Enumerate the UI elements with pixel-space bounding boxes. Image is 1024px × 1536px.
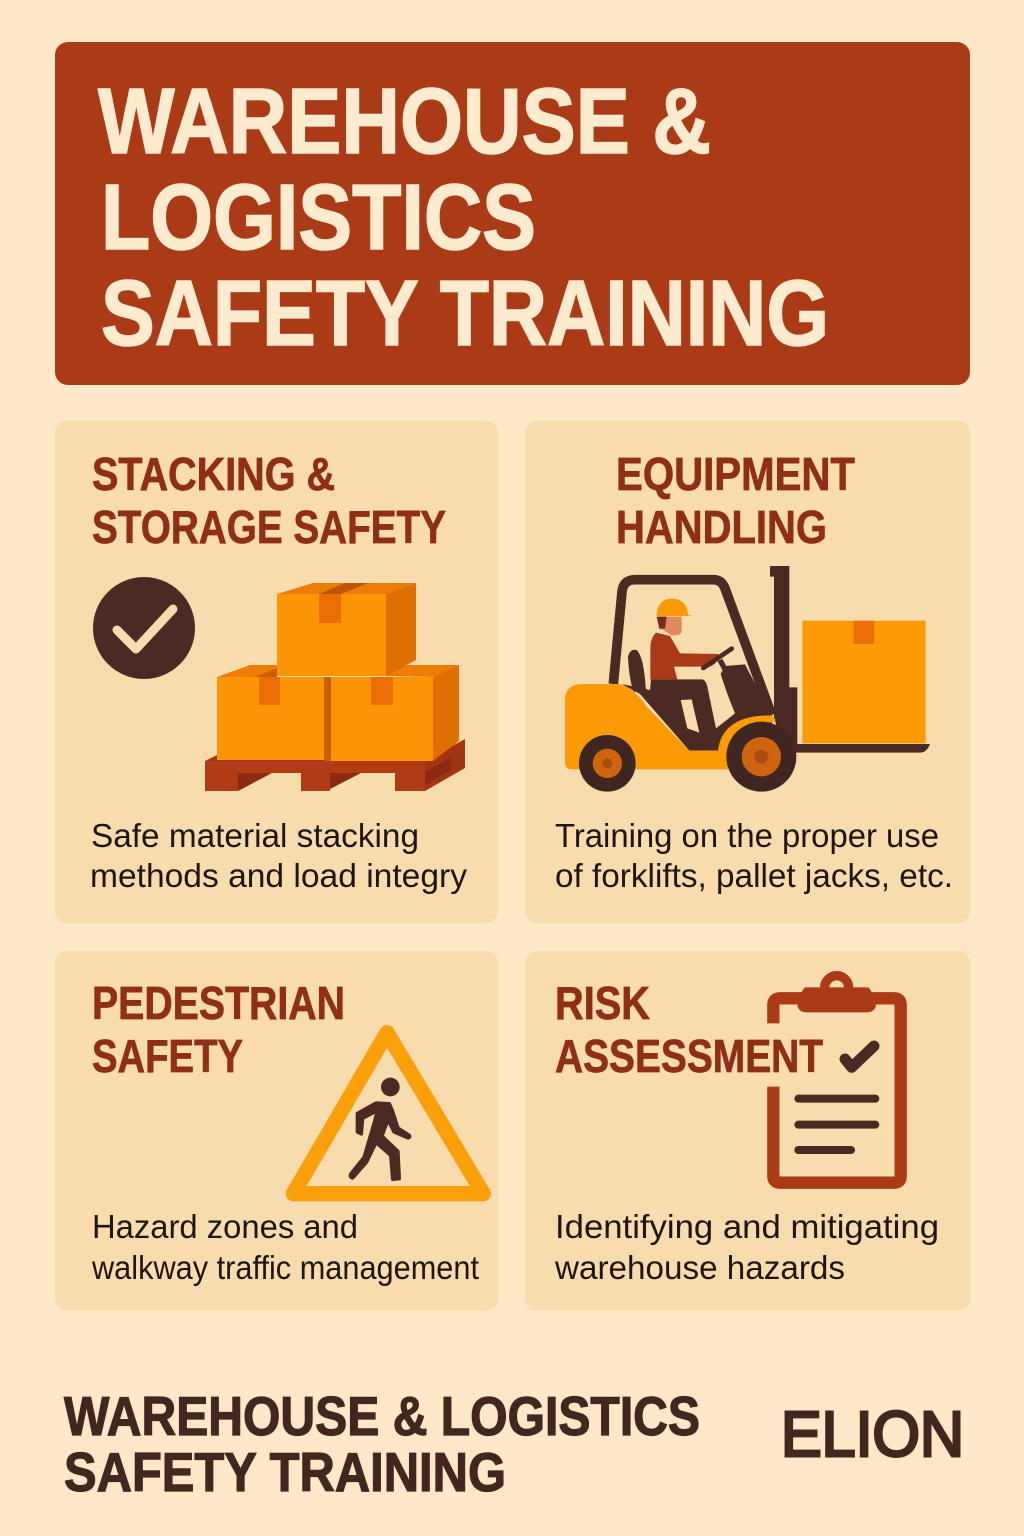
icon: stacked boxes on pallet bbox=[205, 583, 465, 791]
description: equipment: of forklifts, pallet jacks, etc. bbox=[555, 858, 953, 895]
panel: equipment handling bbox=[525, 421, 970, 923]
description: pedestrian bbox=[91, 1209, 480, 1287]
heading: equipment handling bbox=[616, 448, 855, 553]
heading: risk assessment: ASSESSMENT bbox=[555, 1030, 823, 1082]
description: risk assessment bbox=[554, 1209, 939, 1287]
footer logo: ELION: ELION bbox=[781, 1398, 964, 1470]
heading: pedestrian safety bbox=[92, 977, 345, 1082]
heading: equipment handling: HANDLING bbox=[616, 501, 827, 553]
title banner: LOGISTICS bbox=[101, 165, 536, 269]
heading: equipment handling: EQUIPMENT bbox=[616, 448, 855, 500]
description: risk assessment: Identifying and mitigating bbox=[555, 1209, 939, 1246]
description: pedestrian: Hazard zones and bbox=[92, 1209, 358, 1246]
description: risk assessment: warehouse hazards bbox=[554, 1250, 845, 1287]
footer title: SAFETY TRAINING bbox=[64, 1441, 506, 1503]
heading: stacking and storage safety: STACKING & bbox=[92, 448, 335, 500]
heading: stacking and storage safety bbox=[92, 448, 446, 553]
description: stacking: Safe material stacking bbox=[91, 818, 419, 855]
description: stacking bbox=[90, 818, 467, 895]
title banner: SAFETY TRAINING bbox=[101, 261, 829, 365]
icon: clipboard checklist bbox=[773, 976, 901, 1183]
title banner: WAREHOUSE & bbox=[98, 69, 711, 173]
description: equipment: Training on the proper use bbox=[555, 818, 939, 855]
icon: check mark badge bbox=[93, 577, 195, 679]
title banner bbox=[55, 42, 970, 385]
heading: stacking and storage safety: STORAGE SAFETY bbox=[92, 501, 446, 553]
footer title: WAREHOUSE & LOGISTICS bbox=[64, 1385, 700, 1447]
heading: pedestrian safety: PEDESTRIAN bbox=[92, 977, 345, 1029]
heading: risk assessment: RISK bbox=[555, 977, 650, 1029]
description: equipment bbox=[555, 818, 953, 895]
panel: pedestrian safety bbox=[55, 951, 498, 1311]
panel: stacking and storage safety bbox=[55, 421, 498, 923]
footer title bbox=[64, 1385, 700, 1503]
icon: forklift with driver and box bbox=[565, 566, 930, 792]
heading: risk assessment bbox=[555, 977, 823, 1082]
heading: pedestrian safety: SAFETY bbox=[92, 1030, 243, 1082]
description: stacking: methods and load integry bbox=[90, 858, 467, 895]
description: pedestrian: walkway traffic management bbox=[91, 1250, 480, 1287]
panel: risk assessment bbox=[525, 951, 970, 1311]
icon: pedestrian warning triangle bbox=[293, 1033, 483, 1194]
